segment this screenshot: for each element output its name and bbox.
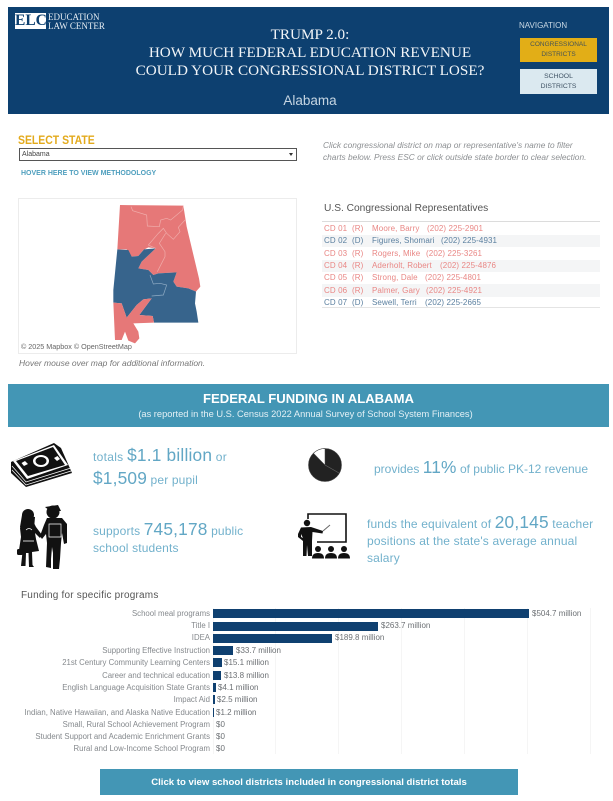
row text: CD 06 bbox=[324, 286, 482, 295]
bar chart: funding for specific programs: $4.1 million bbox=[218, 683, 258, 692]
bar chart: funding for specific programs: $189.8 million bbox=[335, 633, 384, 642]
title: TRUMP 2.0: bbox=[271, 26, 349, 43]
row: CD 01: CD 01 bbox=[324, 224, 347, 233]
bar chart: funding for specific programs bbox=[24, 608, 591, 754]
district: central blue bbox=[113, 248, 198, 323]
row: CD 07: CD 07 bbox=[324, 298, 347, 307]
bar: School meal programs: School meal programs bbox=[132, 609, 210, 618]
bar: Small, Rural School Achievement Program: Small, Rural School Achievement Program bbox=[63, 720, 210, 729]
row: CD 04 bbox=[322, 260, 600, 272]
bar chart: funding for specific programs: $1.2 million bbox=[216, 708, 256, 717]
dropdown value: Alabama bbox=[22, 151, 50, 158]
row: CD 03: Rogers, Mike bbox=[372, 249, 420, 258]
row text: CD 06: CD 06 bbox=[324, 286, 347, 295]
row: CD 07 bbox=[324, 298, 481, 307]
logo wordmark: LAW CENTER bbox=[48, 21, 105, 31]
panel: congressional representatives bbox=[322, 203, 600, 307]
map hint: Hover mouse over map for additional information. bbox=[19, 358, 205, 368]
row: CD 03 bbox=[324, 249, 482, 258]
icon: students bbox=[17, 505, 67, 569]
row: CD 02 bbox=[322, 235, 600, 247]
row: CD 07: (202) 225-2665 bbox=[425, 298, 481, 307]
stat line 1: supports 745,178 public bbox=[93, 519, 243, 539]
row text: CD 04 bbox=[324, 261, 496, 270]
icon: stack of money bbox=[11, 443, 72, 487]
select state heading: SELECT STATE bbox=[18, 133, 95, 147]
button: congressional districts: CONGRESSIONAL bbox=[530, 41, 587, 48]
row text: CD 04: Aderholt, Robert bbox=[372, 261, 432, 270]
title: HOW MUCH FEDERAL EDUCATION REVENUE bbox=[149, 44, 471, 61]
table heading: U.S. Congressional Representatives bbox=[324, 203, 488, 214]
row text: CD 02: CD 02 bbox=[324, 236, 347, 245]
table top rule bbox=[322, 221, 600, 222]
district: north red bbox=[117, 205, 200, 292]
instructions: charts below. Press ESC or click outside state border to clear selection. bbox=[323, 152, 586, 162]
row: CD 05 bbox=[324, 273, 481, 282]
stat line 1: totals $1.1 billion or bbox=[93, 445, 227, 465]
title: COULD YOUR CONGRESSIONAL DISTRICT LOSE? bbox=[136, 62, 484, 79]
icon: pie chart 11 percent bbox=[308, 448, 342, 482]
button: school districts bbox=[520, 69, 597, 94]
stat: teacher positions bbox=[367, 512, 593, 565]
bar chart: funding for specific programs: $263.7 million bbox=[381, 621, 430, 630]
stat: students supported bbox=[93, 519, 243, 555]
row: CD 03: (R) bbox=[352, 249, 363, 258]
row: CD 05: (202) 225-4801 bbox=[425, 273, 481, 282]
bar chart: funding for specific programs: $0 bbox=[216, 744, 225, 753]
row text: CD 02: (202) 225-4931 bbox=[441, 236, 497, 245]
state dropdown bbox=[19, 148, 297, 161]
district borders bbox=[131, 206, 185, 272]
button: school districts: SCHOOL bbox=[544, 72, 573, 80]
row: CD 01: Moore, Barry bbox=[372, 224, 419, 233]
logo mark: ELC bbox=[15, 12, 47, 29]
bar: Supporting Effective Instruction: Supporting Effective Instruction bbox=[102, 646, 210, 655]
title bbox=[136, 26, 484, 79]
row text: CD 06: (202) 225-4921 bbox=[426, 286, 482, 295]
state name: Alabama bbox=[283, 93, 337, 108]
row: CD 01 bbox=[324, 224, 483, 233]
row: CD 01: (202) 225-2901 bbox=[427, 224, 483, 233]
icon: teacher at whiteboard bbox=[298, 513, 350, 558]
section title: FEDERAL FUNDING IN ALABAMA bbox=[203, 391, 414, 406]
stat line 2: $1,509 per pupil bbox=[93, 468, 198, 488]
row: CD 01: (R) bbox=[352, 224, 363, 233]
row text: CD 04: (R) bbox=[352, 261, 363, 270]
stat line 1: funds the equivalent of 20,145 teacher bbox=[367, 512, 593, 532]
bar: Title I: Title I bbox=[191, 621, 210, 630]
table bottom rule bbox=[322, 307, 600, 308]
row text: CD 02: (D) bbox=[352, 236, 363, 245]
bar: Student Support and Academic Enrichment Grants: Student Support and Academic Enrichment Grants bbox=[35, 732, 210, 741]
row: CD 05: CD 05 bbox=[324, 273, 347, 282]
section subtitle: (as reported in the U.S. Census 2022 Annual Survey of School System Finances) bbox=[138, 409, 473, 419]
row: CD 06 bbox=[322, 284, 600, 297]
map attribution: © 2025 Mapbox © OpenStreetMap bbox=[21, 342, 132, 351]
chart heading: Funding for specific programs bbox=[21, 590, 159, 601]
row text: CD 02 bbox=[324, 236, 497, 245]
stat line 2: school students bbox=[93, 541, 179, 555]
bar: 21st Century Community Learning Centers: 21st Century Community Learning Centers bbox=[62, 658, 210, 667]
row text: CD 02: Figures, Shomari bbox=[372, 236, 435, 245]
button: view school districts bbox=[100, 769, 518, 795]
central district border bbox=[150, 275, 167, 296]
bar chart: funding for specific programs: $33.7 million bbox=[236, 646, 281, 655]
row: CD 05: (R) bbox=[352, 273, 363, 282]
bar: Impact Aid: Impact Aid bbox=[174, 695, 210, 704]
header banner bbox=[8, 7, 609, 114]
bar chart: funding for specific programs: $504.7 million bbox=[532, 609, 581, 618]
stat: share of revenue: provides 11% of public PK-12 revenue bbox=[374, 457, 588, 477]
logo: Education Law Center bbox=[15, 12, 105, 31]
row: CD 07: Sewell, Terri bbox=[372, 298, 417, 307]
stat line 2: positions at the state's average annual bbox=[367, 534, 577, 548]
bar: Career and technical education: Career and technical education bbox=[102, 671, 210, 680]
stat: total funding bbox=[93, 445, 227, 488]
bar: English Language Acquisition State Grants: English Language Acquisition State Grants bbox=[62, 683, 210, 692]
row: CD 07: (D) bbox=[352, 298, 363, 307]
row: CD 03: (202) 225-3261 bbox=[426, 249, 482, 258]
chart gridlines bbox=[213, 608, 591, 754]
bar: IDEA: IDEA bbox=[192, 633, 210, 642]
row: CD 05: Strong, Dale bbox=[372, 273, 418, 282]
section banner: federal funding bbox=[8, 384, 609, 427]
bar chart: funding for specific programs: $2.5 million bbox=[217, 695, 257, 704]
row: CD 03: CD 03 bbox=[324, 249, 347, 258]
dropdown arrow bbox=[289, 153, 293, 156]
logo wordmark: EDUCATION bbox=[48, 12, 100, 22]
bar chart: funding for specific programs: $0 bbox=[216, 732, 225, 741]
bar chart: funding for specific programs: $13.8 million bbox=[224, 671, 269, 680]
row text: CD 06: (R) bbox=[352, 286, 363, 295]
panel: congressional district map bbox=[18, 198, 297, 354]
row text: CD 04: (202) 225-4876 bbox=[440, 261, 496, 270]
bar chart: funding for specific programs: $15.1 million bbox=[224, 658, 269, 667]
button: congressional districts bbox=[520, 38, 597, 62]
row text: CD 04: CD 04 bbox=[324, 261, 347, 270]
bar: Rural and Low-Income School Program: Rural and Low-Income School Program bbox=[73, 744, 210, 753]
button: school districts: DISTRICTS bbox=[541, 82, 576, 90]
button: congressional districts: DISTRICTS bbox=[541, 51, 576, 58]
bar: Indian, Native Hawaiian, and Alaska Native Education: Indian, Native Hawaiian, and Alaska Native Education bbox=[24, 708, 210, 717]
navigation label: NAVIGATION bbox=[519, 21, 567, 30]
instructions: Click congressional district on map or representative's name to filter bbox=[323, 140, 573, 150]
button: view school districts: Click to view school districts included in congressional district totals bbox=[151, 777, 467, 788]
stat line 3: salary bbox=[367, 551, 400, 565]
row text: CD 06: Palmer, Gary bbox=[372, 286, 420, 295]
district: south red bbox=[113, 298, 154, 343]
map of Alabama districts bbox=[113, 205, 200, 344]
methodology link: HOVER HERE TO VIEW METHODOLOGY bbox=[21, 170, 156, 177]
bar chart: funding for specific programs: $0 bbox=[216, 720, 225, 729]
instructions bbox=[323, 140, 586, 162]
logo wordmark bbox=[48, 12, 105, 31]
